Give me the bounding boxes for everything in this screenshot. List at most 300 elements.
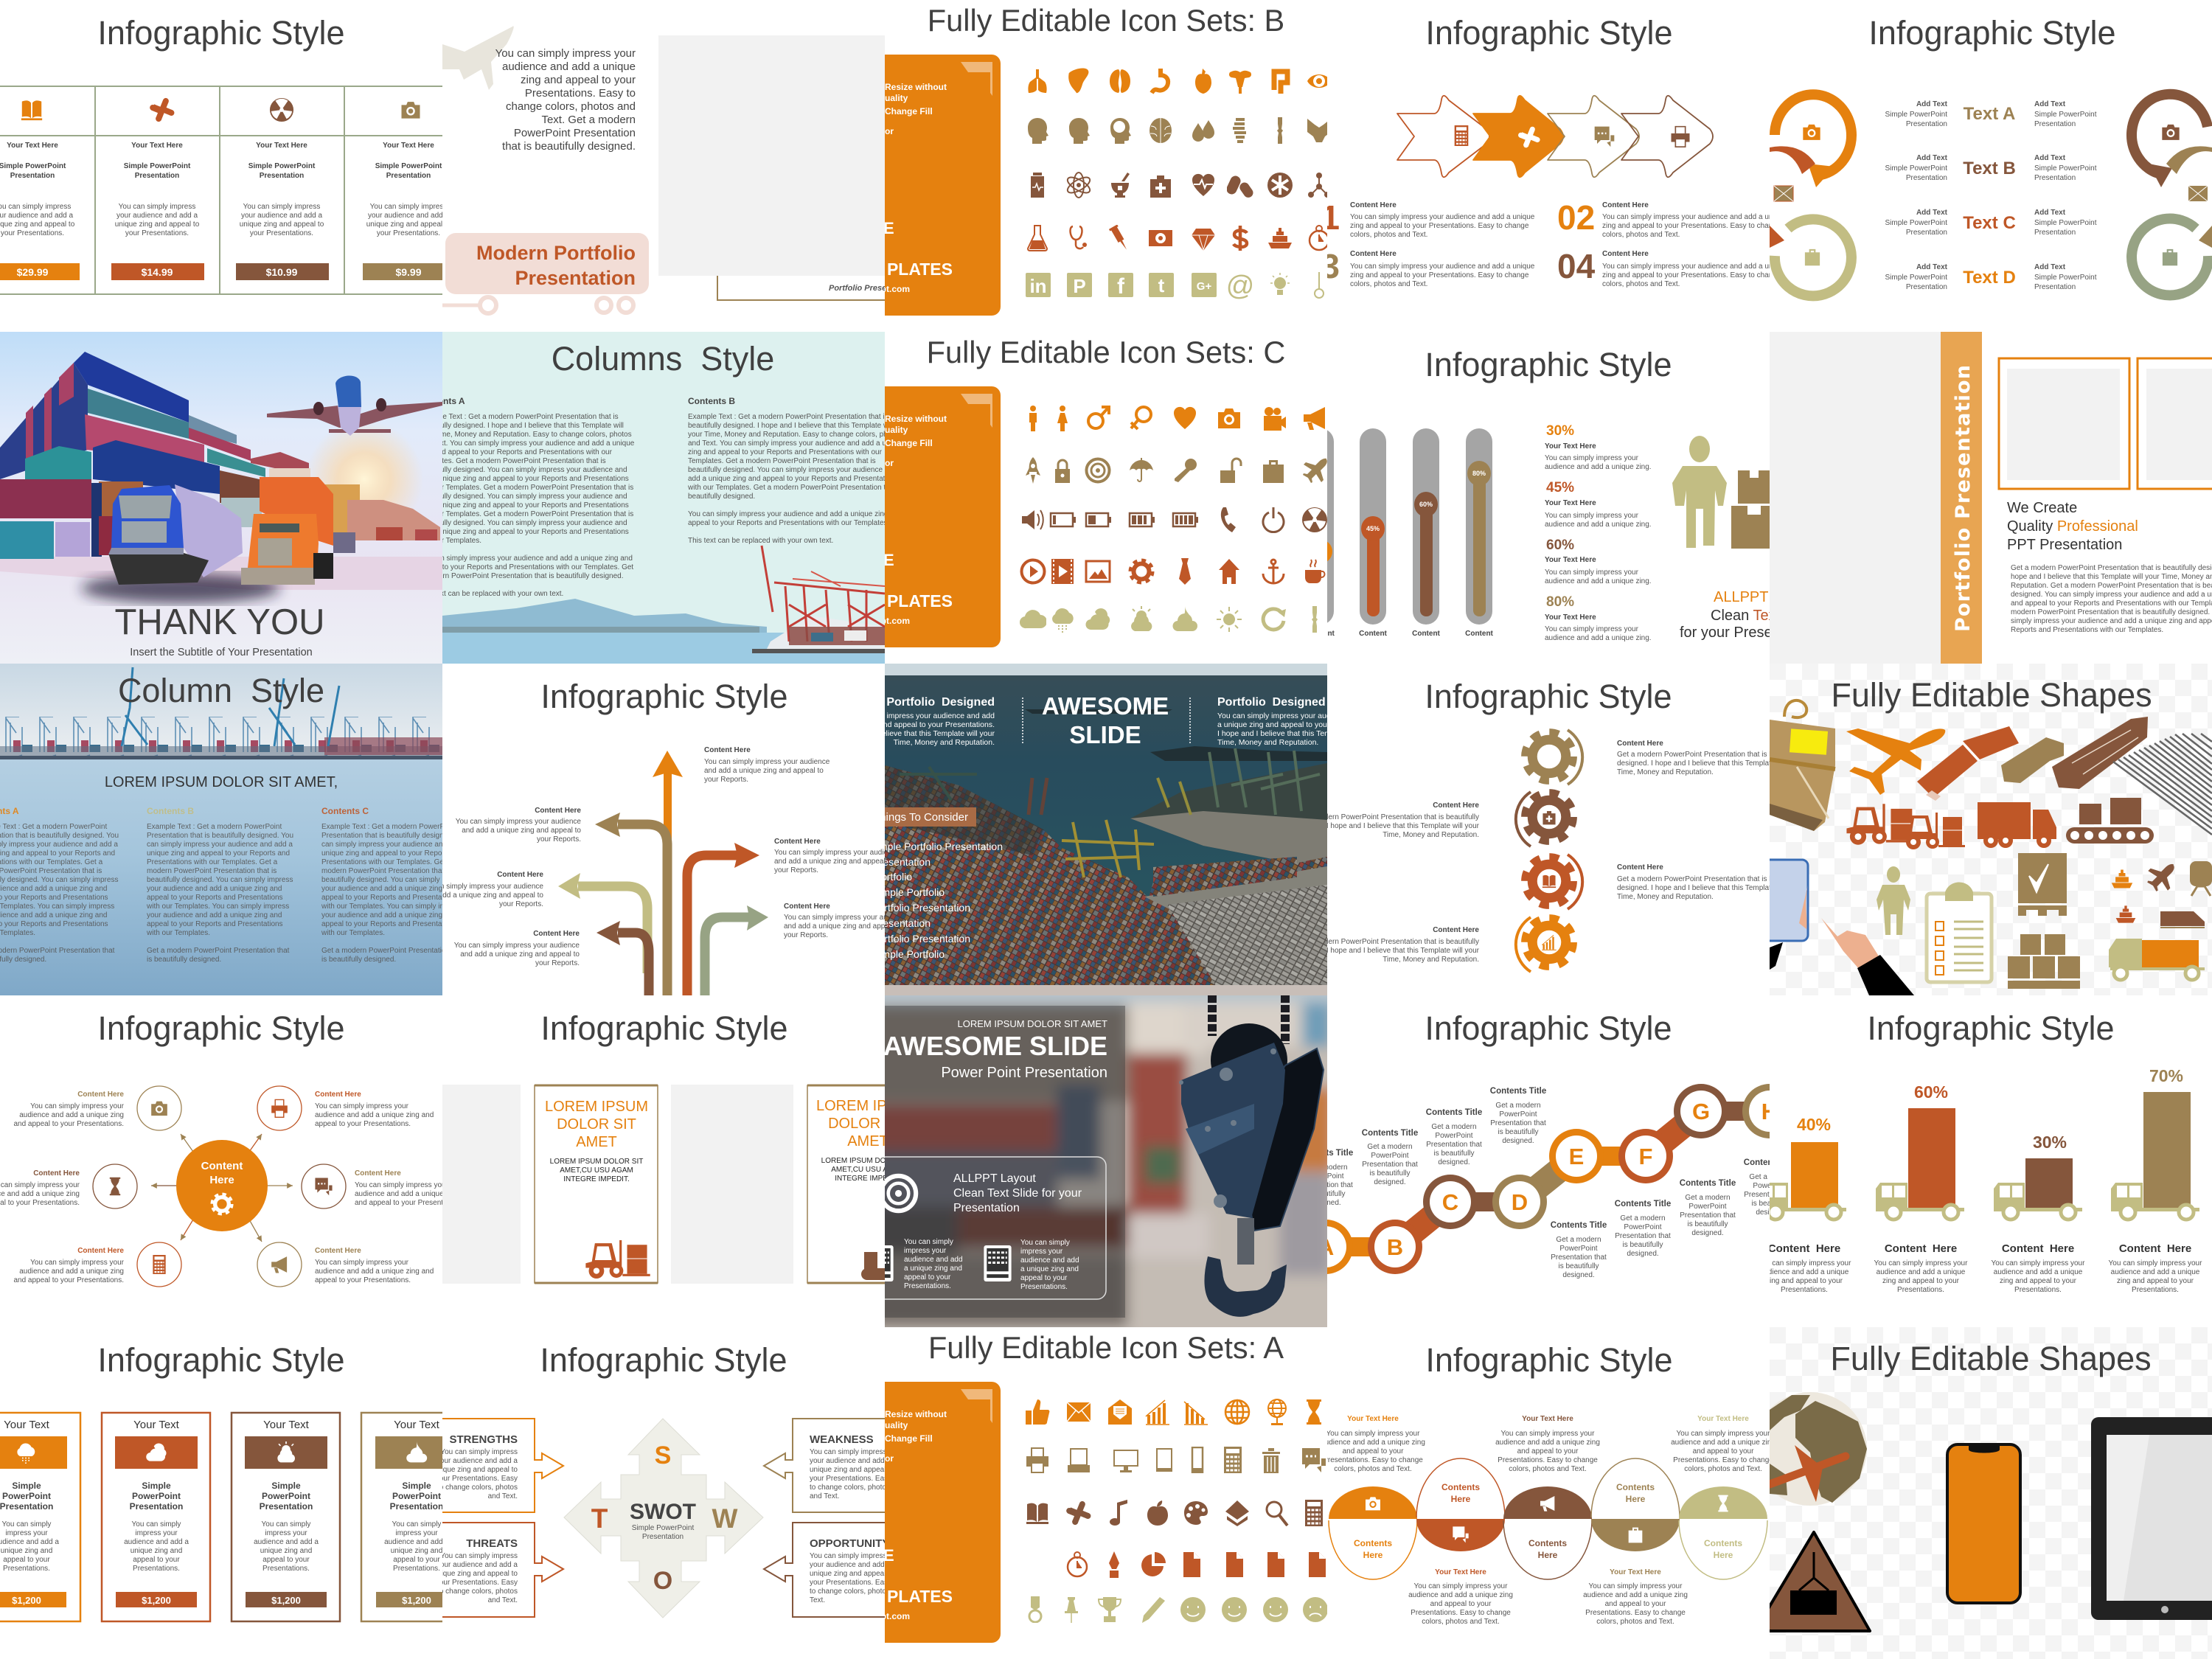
top left text [831, 696, 995, 747]
text bottom 2: Presentations. Easy to change [1585, 1609, 1686, 1617]
column 1 text: Your Text Here [7, 142, 58, 150]
card tan: unique zing and [391, 1547, 442, 1555]
text bottom 1 [1408, 1568, 1513, 1626]
text block 1: Content Here [1350, 201, 1397, 209]
description text: zing and appeal to your [521, 74, 636, 86]
bar labels: Content [1465, 630, 1494, 638]
label bottom right [315, 1247, 434, 1284]
price tags: $29.99 [17, 266, 49, 278]
card orange: You can simply [2, 1520, 51, 1528]
card brown: Presentation [260, 1501, 313, 1512]
text G: designed. [1691, 1229, 1724, 1237]
column C: is beautifully designed. [321, 956, 396, 964]
top left text: Portfolio Designed [886, 696, 995, 709]
icon: brown ship [2052, 717, 2148, 789]
label bottom left: Content Here [77, 1247, 124, 1255]
icon row: social: G+ [1197, 280, 1211, 293]
truck bar 70 percent [2111, 1066, 2199, 1220]
strengths box: You can simply impress [442, 1448, 518, 1456]
stat 30 percent: You can simply impress your [1545, 454, 1638, 462]
text block 3: Content Here [1350, 250, 1397, 258]
column 2 text: You can simply impress [119, 203, 195, 211]
caption frame [717, 276, 914, 300]
crane hook [1179, 995, 1324, 1317]
node: printer [257, 1086, 302, 1130]
icon: tan truck [2001, 737, 2064, 783]
icon: chat [1595, 127, 1614, 147]
center heading: AWESOME [1042, 692, 1169, 720]
gear 3 [1527, 855, 1582, 909]
column 2 text: Simple PowerPoint [124, 162, 191, 170]
title: Infographic Style [1425, 1009, 1672, 1047]
text F: PowerPoint [1624, 1223, 1662, 1231]
card rust: Your Text [133, 1419, 180, 1431]
title: Fully Editable Shapes [1831, 676, 2152, 714]
card tan: impress your [395, 1529, 438, 1537]
bar labels: Content [1412, 630, 1441, 638]
column 2 text: unique zing and appeal to [115, 220, 200, 229]
text top 2: Presentations. Easy to change [1498, 1456, 1598, 1464]
truck bar 30 percent [1994, 1133, 2082, 1220]
strengths box: STRENGTHS [449, 1433, 518, 1446]
text F [1615, 1200, 1671, 1258]
circle 5: Here [1714, 1550, 1733, 1560]
chain connectors [1327, 1111, 1770, 1247]
title: Infographic Style [97, 14, 345, 52]
node: megaphone [257, 1242, 302, 1287]
text top 2: You can simply impress your [1501, 1430, 1594, 1438]
orange side panel: PLATES [887, 1587, 953, 1606]
label bottom left: You can simply impress your [30, 1259, 124, 1267]
stat 30 percent: audience and add a unique zing. [1545, 463, 1652, 471]
text bottom 1: You can simply impress your [1414, 1582, 1507, 1590]
card rust [102, 1413, 210, 1621]
title: Infographic Style [1425, 14, 1673, 52]
panel: modern portfolio slide [442, 0, 885, 332]
icon: brown plane [2147, 864, 2174, 891]
text B: Simple PowerPoint [1885, 164, 1947, 173]
chain node C: C [1442, 1189, 1458, 1215]
label top right: audience and add a unique zing and [315, 1111, 434, 1119]
stat 30 percent: Your Text Here [1545, 442, 1596, 451]
train [108, 484, 243, 585]
stat 45 percent: 45% [1546, 480, 1574, 495]
card tan: Your Text [394, 1419, 440, 1431]
number 02: 02 [1557, 198, 1595, 237]
column A [0, 806, 119, 964]
small text 1: You can simply [904, 1238, 953, 1246]
text D: Presentation [2034, 283, 2076, 291]
text top 2: audience and add a unique zing [1495, 1439, 1600, 1447]
label top right: You can simply impress your [315, 1102, 408, 1110]
label bottom left [13, 1247, 125, 1284]
icon: puzzle [146, 94, 178, 126]
center heading: SLIDE [1069, 721, 1141, 748]
body text: Reports and Presentations with our Templates. [2011, 626, 2163, 634]
text B: Add Text [1916, 154, 1948, 162]
small text 1: impress your [904, 1247, 947, 1255]
icon: orange ship [2112, 870, 2132, 888]
node: camera [137, 1086, 181, 1130]
letter W: W [712, 1503, 738, 1534]
card 1 [535, 1085, 658, 1283]
small text 2: impress your [1020, 1248, 1063, 1256]
text E: Contents Title [1551, 1221, 1607, 1230]
text bottom 1: and appeal to your [1430, 1600, 1492, 1608]
label bottom right: You can simply impress your [315, 1259, 408, 1267]
text D: Simple PowerPoint [2034, 274, 2096, 282]
icon: tan train [2190, 861, 2212, 896]
orange side panel: Resize without [885, 1409, 947, 1419]
text B: Text B [1963, 159, 2016, 178]
chain node H [1742, 1084, 1797, 1138]
chain node B [1368, 1220, 1422, 1274]
circle 4: Contents [1616, 1482, 1655, 1492]
text F: is beautifully [1622, 1241, 1663, 1249]
icon: pointing hand [1770, 885, 1914, 995]
orange side panel: Change Fill [885, 106, 933, 116]
orange side panel: Resize without [885, 414, 947, 424]
text G: is beautifully [1687, 1220, 1728, 1228]
text top 3: and appeal to your [1693, 1447, 1754, 1455]
center heading [1042, 692, 1169, 748]
title: Fully Editable Icon Sets: B [928, 3, 1284, 38]
panel: gears slide [1327, 664, 1770, 995]
panel: SWOT slide [442, 1327, 885, 1659]
card brown: Simple [271, 1481, 301, 1491]
label bottom right: audience and add a unique zing and [315, 1267, 434, 1276]
text E: Presentation that [1551, 1253, 1607, 1262]
top right text: Portfolio Designed [1217, 696, 1326, 709]
text bottom 2: and appeal to your [1605, 1600, 1666, 1608]
column B: appeal to your Reports and Presentations [147, 920, 283, 928]
orange side panel: uality [885, 93, 908, 103]
text block 1: You can simply impress your audience and add a unique [1350, 213, 1534, 221]
text top 3: Your Text Here [1697, 1415, 1749, 1423]
card tan: $1,200 [402, 1595, 431, 1606]
description text: PowerPoint Presentation [514, 127, 636, 139]
card rust: Presentation [130, 1501, 183, 1512]
orange side panel: uality [885, 425, 908, 435]
panel: icon set B [885, 0, 1327, 332]
caption 4: You can simply impress your [2109, 1259, 2202, 1267]
outlined content box [870, 1157, 1106, 1299]
icon row: media and home [1022, 558, 1324, 585]
description text: You can simply impress your [495, 47, 636, 60]
stat 80 percent [1545, 594, 1652, 642]
card 1: AMET [576, 1134, 617, 1150]
text right 3 [784, 902, 910, 939]
container stacks photo [0, 352, 310, 559]
icon row: weather [1020, 606, 1318, 633]
column 3 text: your audience and add a [241, 212, 322, 220]
card orange: Presentation [0, 1501, 53, 1512]
opportunity box: You can simply impress [810, 1552, 885, 1560]
SWOT cross arrows [564, 1419, 763, 1618]
text B: Presentation that [1362, 1161, 1418, 1169]
text F: Get a modern [1620, 1214, 1666, 1222]
text block 2: Content Here [1602, 201, 1649, 209]
caption 4 [2109, 1242, 2202, 1294]
text C: Text C [1963, 213, 2016, 233]
text block 1: colors, photos and Text. [1350, 231, 1427, 239]
arrow: khaki left [558, 873, 647, 973]
caption 2: You can simply impress your [1874, 1259, 1967, 1267]
description text: change colors, photos and [506, 100, 636, 113]
weakness box [764, 1419, 894, 1512]
bar: 80 percent: 80% [1472, 470, 1486, 477]
icon: conveyor with boxes [2066, 798, 2154, 844]
stat 45 percent: You can simply impress your [1545, 512, 1638, 520]
text A: Add Text [1916, 100, 1948, 108]
text top 1: Your Text Here [1347, 1415, 1399, 1423]
text block 4 [1602, 250, 1787, 288]
pale truck box with title: Modern Portfolio [476, 242, 636, 264]
panel: awesome slide harbour [885, 664, 1327, 995]
arrow: sage right [705, 905, 768, 995]
text F: Contents Title [1615, 1200, 1671, 1208]
number 04: 04 [1557, 247, 1596, 285]
label bottom right: appeal to your Presentations. [315, 1276, 411, 1284]
truck [241, 514, 355, 585]
text G: Contents Title [1680, 1179, 1736, 1188]
text C: Presentation [2034, 229, 2076, 237]
text D [1490, 1087, 1546, 1145]
subtitle: Insert the Subtitle of Your Presentation [130, 647, 313, 658]
title: Infographic Style [540, 1341, 787, 1379]
text left 1 [456, 807, 581, 844]
text 2: Content Here [1433, 801, 1479, 810]
column C [321, 806, 468, 964]
airplane [267, 376, 442, 436]
letter T: T [591, 1503, 608, 1534]
column 2 text: your Presentations. [125, 229, 189, 237]
text block 3: colors, photos and Text. [1350, 280, 1427, 288]
barcode strip [2113, 734, 2212, 835]
text bottom 2: audience and add a unique zing [1583, 1591, 1688, 1599]
circle 2: Contents [1441, 1482, 1480, 1492]
panel: branching arrows slide [442, 664, 885, 995]
icon: envelope right [2188, 186, 2208, 201]
body text: hope and I believe that this Template will your Time, Money and [2011, 573, 2212, 581]
text C [1885, 209, 2097, 237]
photo frame 2 [2138, 358, 2212, 489]
text bottom 2: Your Text Here [1610, 1568, 1661, 1576]
card brown: PowerPoint [262, 1491, 310, 1501]
icon: book [21, 100, 42, 120]
description text: that is beautifully designed. [502, 140, 636, 153]
chain node B: B [1387, 1234, 1403, 1260]
icon: phone [1762, 860, 1808, 941]
circle 5 [1679, 1486, 1767, 1579]
text 1: Time, Money and Reputation. [1617, 768, 1714, 776]
vertical band [1941, 332, 1982, 664]
column B: Example Text : Get a modern PowerPoint [147, 823, 282, 831]
column B: Presentation that is beautifully designed. You [147, 832, 293, 840]
card brown [232, 1413, 340, 1621]
column 4 text: your Presentations. [377, 229, 440, 237]
stat 60 percent: 60% [1546, 538, 1574, 553]
circle 2 [1416, 1458, 1505, 1551]
stat 45 percent: audience and add a unique zing. [1545, 521, 1652, 529]
title: Infographic Style [97, 1341, 345, 1379]
arrow: rust right [687, 843, 759, 995]
circle 1 [1329, 1486, 1417, 1579]
text C: designed. [1438, 1158, 1470, 1166]
circle 1: Contents [1354, 1538, 1392, 1548]
caption 3: You can simply impress your [1992, 1259, 2084, 1267]
card tan [361, 1413, 470, 1621]
stat 80 percent: You can simply impress your [1545, 625, 1638, 633]
panel: progress bars slide [1327, 332, 1770, 664]
label bottom left: and appeal to your Presentations. [13, 1276, 124, 1284]
column A [417, 396, 635, 598]
caption 4: audience and add a unique [2111, 1268, 2200, 1276]
text left 2: your Reports. [499, 900, 543, 908]
card rust: audience and add a [124, 1538, 189, 1546]
text 3 [1617, 863, 1804, 901]
heading text: Power Point Presentation [941, 1065, 1107, 1081]
opportunity box: Text. [810, 1596, 825, 1604]
column B: appeal to your Reports and Presentations [147, 894, 283, 902]
card tan: appeal to your [393, 1556, 440, 1564]
column B: unique zing and appeal to your Reports and [147, 849, 290, 858]
column 3 text: You can simply impress [243, 203, 320, 211]
column B: modern PowerPoint Presentation that is [147, 867, 276, 875]
card brown: audience and add a [254, 1538, 319, 1546]
circle 3: Here [1538, 1550, 1558, 1560]
letter S: S [655, 1441, 671, 1470]
card brown: Your Text [263, 1419, 310, 1431]
text E [1551, 1221, 1607, 1279]
description text: Presentations. Easy to [525, 87, 636, 100]
chain node E: E [1569, 1144, 1584, 1169]
card rust: PowerPoint [132, 1491, 181, 1501]
text bottom 2 [1583, 1568, 1688, 1626]
photo frame 1 [1999, 358, 2129, 489]
chain node F [1618, 1129, 1673, 1183]
orange side panel: Resize without [885, 82, 947, 92]
gear 2 [1516, 792, 1571, 846]
icon: warning sign with luggage [1755, 1532, 1870, 1631]
column 1 text: your Presentations. [1, 229, 64, 237]
icon: tablet [2091, 1417, 2212, 1620]
parcel box [1770, 700, 1835, 831]
orange side panel: PLATES [887, 260, 953, 279]
weakness box: and Text. [810, 1492, 839, 1500]
column 1 text: Simple PowerPoint [0, 162, 66, 170]
column B: Contents B [147, 806, 194, 816]
price tags: $14.99 [142, 266, 173, 278]
card brown: appeal to your [262, 1556, 310, 1564]
column 2 text: Your Text Here [131, 142, 183, 150]
card 1: DOLOR SIT [557, 1116, 636, 1133]
text top 1 [1321, 1415, 1425, 1473]
ring: sage [2132, 218, 2212, 295]
text left 3: You can simply impress your audience [454, 942, 580, 950]
icon row: lab and finance [1028, 224, 1329, 252]
gear 1 [1527, 730, 1582, 785]
text D: Get a modern [1495, 1102, 1541, 1110]
panel: column style slide [0, 664, 442, 995]
caption 1: Presentations. [1781, 1286, 1828, 1294]
text top right: and add a unique zing and appeal to [704, 767, 824, 775]
text top right: your Reports. [704, 776, 748, 784]
text left 3 [454, 930, 580, 967]
top right text [1217, 696, 1381, 747]
icon: rust truck [1978, 802, 2056, 848]
circle 4 [1591, 1458, 1680, 1551]
label top left [13, 1091, 125, 1128]
threats box: THREATS [466, 1537, 518, 1550]
icon row: awards and faces [1029, 1596, 1328, 1623]
panel: editable shapes devices slide [1770, 1327, 2212, 1659]
orange side panel: uality [885, 1420, 908, 1430]
column 3 text: your Presentations. [250, 229, 313, 237]
column 3 text: unique zing and appeal to [240, 220, 324, 229]
caption 2: audience and add a unique [1877, 1268, 1966, 1276]
column 3 text: Simple PowerPoint [248, 162, 316, 170]
thank you heading: THANK YOU [115, 602, 324, 642]
icon row: head and body [1028, 117, 1331, 144]
stat 80 percent: audience and add a unique zing. [1545, 634, 1652, 642]
SWOT center label [630, 1500, 696, 1541]
vertical band: Portfolio Presentation [1952, 365, 1975, 632]
text top 3: colors, photos and Text. [1684, 1465, 1762, 1473]
sea and mountains photo [442, 599, 885, 664]
arrow: tan left [595, 813, 667, 995]
column B: This text can be replaced with your own text. [688, 537, 833, 545]
gear 4 [1516, 917, 1571, 972]
text top 3: You can simply impress your [1677, 1430, 1770, 1438]
card tan: You can simply [392, 1520, 441, 1528]
truck container [260, 477, 333, 546]
blurred container photo [870, 981, 1342, 1342]
icon row: social [1026, 271, 1324, 302]
icon: camera [401, 102, 420, 119]
small text 1: appeal to your [904, 1273, 951, 1281]
icon: globe with plane [1753, 1392, 1867, 1506]
label top right: appeal to your Presentations. [315, 1120, 411, 1128]
label top left: and appeal to your Presentations. [13, 1120, 124, 1128]
text A: Presentation [1906, 120, 1947, 128]
text block 3: You can simply impress your audience and add a unique [1350, 262, 1534, 271]
text C: Add Text [1916, 209, 1948, 217]
icon: pallet of boxes [2008, 934, 2080, 989]
text E: PowerPoint [1559, 1245, 1598, 1253]
threats box [433, 1523, 563, 1617]
text block 4: colors, photos and Text. [1602, 280, 1680, 288]
title: Column Style [118, 672, 324, 709]
icon row: objects [1026, 457, 1327, 484]
bar: 45 percent [1360, 428, 1386, 625]
label middle right: Content Here [355, 1169, 401, 1178]
chain node E [1549, 1129, 1604, 1183]
icon row: social: f [1117, 274, 1125, 299]
stat 60 percent: Your Text Here [1545, 556, 1596, 564]
panel: columns style slide [442, 332, 885, 664]
text left 3: your Reports. [535, 959, 580, 967]
truck bar 30 percent: 30% [2033, 1133, 2067, 1152]
road shadow [81, 574, 280, 603]
card rust: Presentations. [133, 1565, 180, 1573]
strengths box: and Text. [488, 1492, 518, 1500]
content heading: Clean Text Slide for your [953, 1187, 1082, 1200]
label middle left: Content Here [33, 1169, 80, 1178]
text D: Add Text [1916, 263, 1948, 271]
chain node C [1423, 1175, 1478, 1229]
column B [146, 806, 293, 964]
